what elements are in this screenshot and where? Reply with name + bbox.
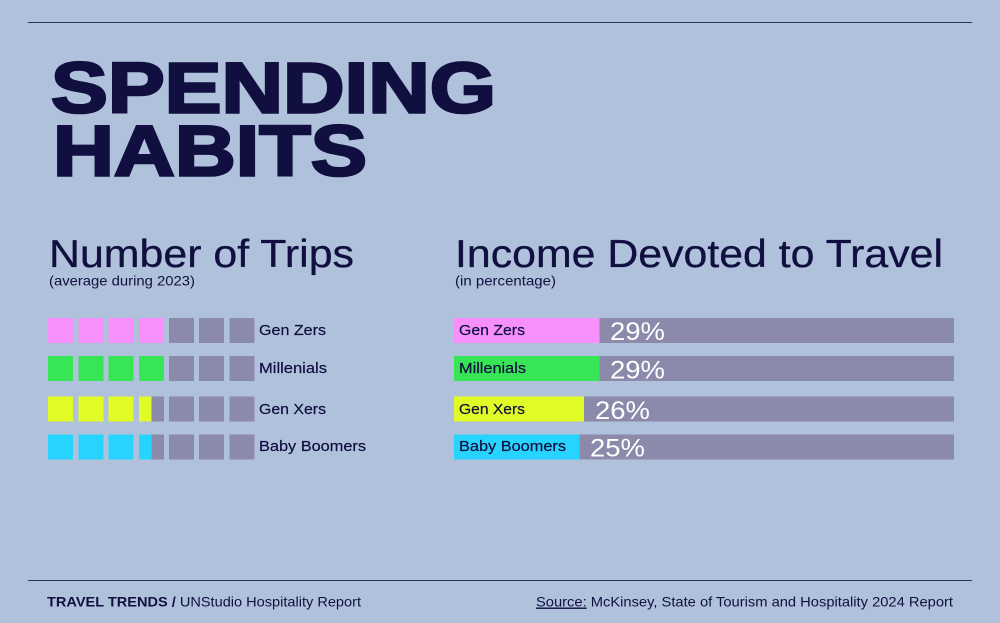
row: Gen Xers trips: Gen Xers (259, 402, 326, 418)
bar: Gen Zers 29%: 29% (610, 318, 665, 346)
row: Gen Xers trips (48, 396, 326, 422)
footer: report credit: TRAVEL TRENDS / UNStudio Hospitality Report (47, 594, 361, 610)
bar: Baby Boomers 25%: 25% (590, 434, 645, 462)
row: Gen Zers trips: Gen Zers (259, 323, 326, 339)
row: Millenials trips (48, 356, 327, 381)
heading: income devoted to travel: (in percentage) (455, 272, 556, 288)
row: Gen Zers trips (48, 318, 326, 343)
bar: Baby Boomers 25% (454, 434, 954, 462)
bar: Millenials 29%: Millenials (459, 361, 526, 377)
heading: number of trips: Number of Trips (49, 233, 354, 276)
bar: Millenials 29% (454, 356, 954, 384)
row: Baby Boomers trips: Baby Boomers (259, 439, 366, 455)
footer: source: Source: McKinsey, State of Tourism and Hospitality 2024 Report (536, 594, 953, 610)
bar: Gen Xers 26%: Gen Xers (459, 402, 525, 418)
bar: Gen Zers 29%: Gen Zers (459, 323, 525, 339)
row: Baby Boomers trips (48, 434, 366, 460)
chart: number of trips pictogram (48, 318, 366, 460)
bar: Gen Xers 26% (454, 396, 954, 425)
row: Millenials trips: Millenials (259, 361, 327, 377)
title: HABITS (53, 112, 367, 192)
heading: income devoted to travel: Income Devoted to Travel (455, 233, 943, 276)
heading: number of trips: (average during 2023) (49, 272, 195, 288)
chart: income devoted to travel bars (454, 318, 954, 462)
title (51, 50, 496, 192)
bar: Baby Boomers 25%: Baby Boomers (459, 439, 566, 455)
title: SPENDING (51, 50, 496, 128)
bar: Millenials 29%: 29% (610, 356, 665, 384)
bar: Gen Zers 29% (454, 318, 954, 346)
bar: Gen Xers 26%: 26% (595, 397, 650, 425)
